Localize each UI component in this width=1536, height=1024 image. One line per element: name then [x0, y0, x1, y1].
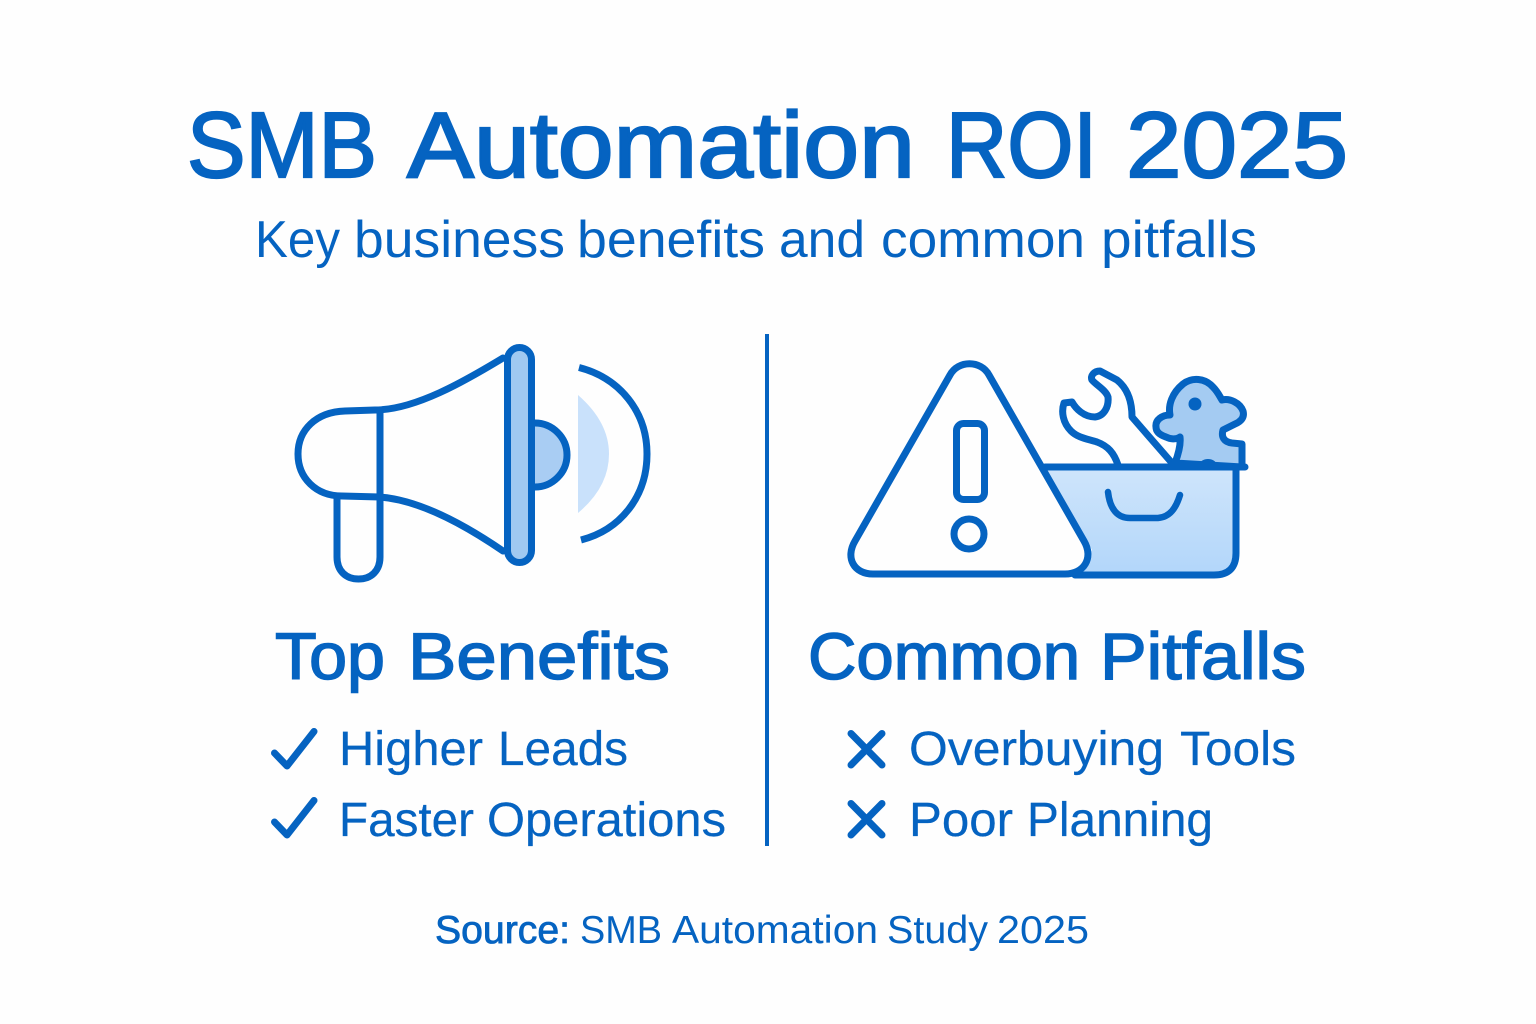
heading: common pitfalls: Common: [808, 619, 1080, 693]
heading: top benefits: Top: [275, 619, 385, 693]
subtitle: Key: [255, 211, 340, 269]
icon: warning triangle: [851, 364, 1088, 574]
title: ROI: [946, 93, 1097, 197]
source line: SMB: [580, 909, 662, 952]
benefit: higher leads: Leads: [498, 723, 628, 776]
benefit: higher leads: Higher: [339, 723, 483, 776]
subtitle: business: [354, 211, 565, 269]
subtitle: benefits: [577, 211, 765, 269]
heading: top benefits: Benefits: [408, 619, 670, 693]
subtitle: and: [779, 211, 865, 269]
subtitle: [255, 211, 1257, 269]
icon: wrench: [1063, 371, 1172, 465]
subtitle: common: [881, 211, 1085, 269]
benefit: higher leads: [339, 723, 628, 776]
pitfall: overbuying tools: [909, 723, 1296, 776]
benefit: faster operations: Operations: [487, 794, 726, 847]
title: SMB: [187, 93, 377, 197]
heading: common pitfalls: [808, 619, 1306, 693]
subtitle: pitfalls: [1101, 211, 1257, 269]
pitfall: overbuying tools: Tools: [1180, 723, 1296, 776]
source line: Study: [887, 909, 988, 952]
pitfall: overbuying tools: Overbuying: [909, 723, 1164, 776]
icon: toolbox: [1045, 467, 1245, 575]
heading: top benefits: [275, 619, 670, 693]
icon: megaphone: [298, 348, 647, 579]
title: 2025: [1126, 93, 1348, 197]
pitfall: poor planning: Poor: [909, 794, 1013, 847]
icon: check 2: [274, 800, 314, 835]
heading: common pitfalls: Pitfalls: [1100, 619, 1306, 693]
source line: Automation: [672, 909, 878, 952]
source line: 2025: [997, 909, 1089, 952]
title: [187, 93, 1348, 197]
benefit: faster operations: Faster: [339, 794, 474, 847]
pitfall: poor planning: Planning: [1027, 794, 1213, 847]
center divider: [765, 334, 769, 846]
icon: check 1: [274, 732, 314, 766]
pitfall: poor planning: [909, 794, 1213, 847]
icon: cross 2: [851, 804, 882, 835]
benefit: faster operations: [339, 794, 726, 847]
source line: Source:: [435, 909, 570, 952]
title: Automation: [407, 93, 915, 197]
icon: gear creature: [1156, 379, 1243, 469]
icon: cross 1: [851, 734, 882, 765]
source line: [435, 909, 1089, 952]
